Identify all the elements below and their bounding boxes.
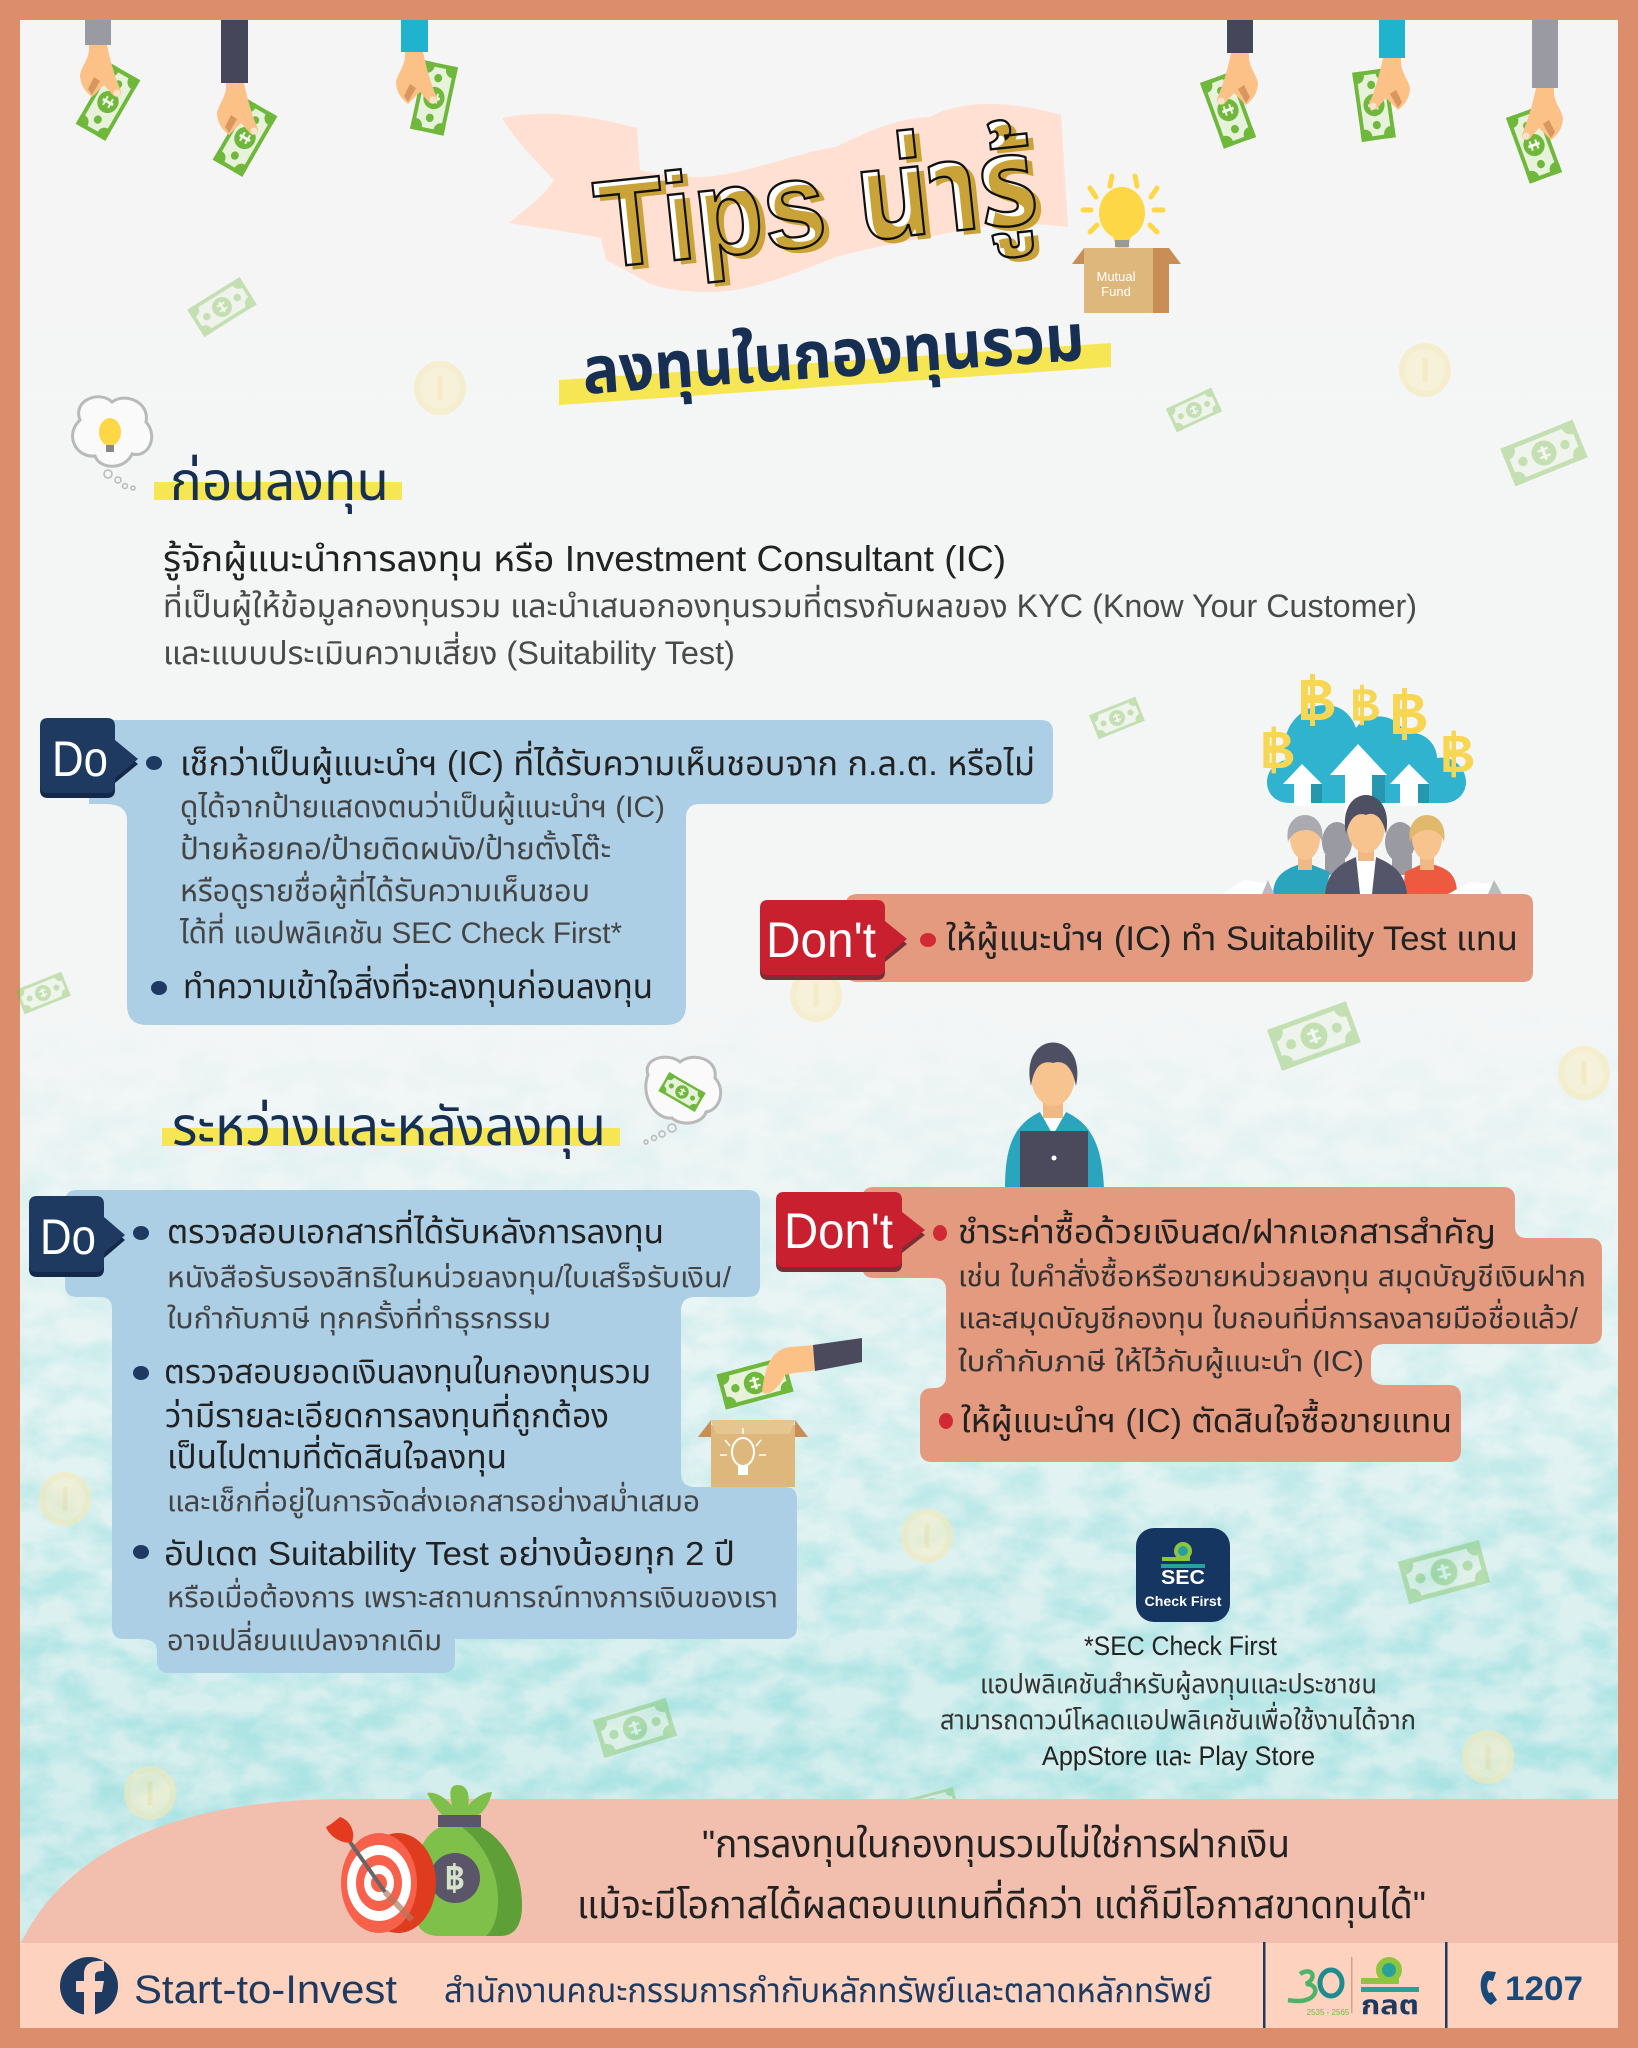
icon: bulb in mutual fund box: Mutual xyxy=(1096,269,1136,284)
title: Tips น่ารู้ xyxy=(588,111,1044,301)
icon: thought cloud with bulb xyxy=(73,397,152,490)
hand 5 with bill xyxy=(1348,20,1410,146)
intro text xyxy=(163,538,1417,671)
quote band xyxy=(20,1799,1618,1945)
do badge: Do xyxy=(52,731,108,787)
bullet item text: หรือดูรายชื่อผู้ที่ได้รับความเห็นชอบ xyxy=(180,870,590,909)
subtitle band xyxy=(559,343,1111,405)
icon: facebook xyxy=(60,1957,118,2015)
title: Tips น่ารู้ xyxy=(588,111,1044,301)
bullet item text: ว่ามีรายละเอียดการลงทุนที่ถูกต้อง xyxy=(165,1393,609,1436)
bullet item text: และเช็กที่อยู่ในการจัดส่งเอกสารอย่างสม่ำเสมอ xyxy=(167,1481,700,1519)
icon: box with bulb outline xyxy=(698,1420,808,1487)
bullet item text: เช็กว่าเป็นผู้แนะนำฯ (IC) ที่ได้รับความเห็นชอบจาก ก.ล.ต. หรือไม่ xyxy=(180,740,1035,784)
logos: 30 years and SEC: 2535 - 2565 xyxy=(1307,2008,1350,2017)
subtitle: ลงทุนในกองทุนรวม xyxy=(580,300,1087,411)
don't badge xyxy=(760,900,907,980)
bullet item text: ให้ผู้แนะนำฯ (IC) ทำ Suitability Test แทน xyxy=(946,920,1518,959)
icon: target with dart xyxy=(326,1817,436,1933)
bullet item text: ป้ายห้อยคอ/ป้ายติดผนัง/ป้ายตั้งโต๊ะ xyxy=(180,830,611,866)
quote text xyxy=(577,1824,1426,1928)
intro text: รู้จักผู้แนะนำการลงทุน หรือ Investment Consultant (IC) xyxy=(163,538,1006,580)
bullet item text: อาจเปลี่ยนแปลงจากเดิม xyxy=(167,1620,442,1657)
bullet item text: ใบกำกับภาษี ให้ไว้กับผู้แนะนำ (IC) xyxy=(958,1346,1364,1379)
icon: hand dropping money xyxy=(712,1338,862,1414)
footer band xyxy=(20,1943,1618,2028)
bullet item text: ดูได้จากป้ายแสดงตนว่าเป็นผู้แนะนำฯ (IC) xyxy=(180,791,665,825)
bullet item text: ใบกำกับภาษี ทุกครั้งที่ทำธุรกรรม xyxy=(167,1298,551,1335)
bullet item text: ได้ที่ แอปพลิเคชัน SEC Check First* xyxy=(179,912,622,950)
title ribbon xyxy=(502,104,1068,292)
do badge xyxy=(40,718,138,798)
icon: bulb in mutual fund box xyxy=(1072,176,1181,313)
bullet item text: และสมุดบัญชีกองทุน ใบถอนที่มีการลงลายมือชื่อแล้ว/ xyxy=(958,1298,1579,1335)
heading: before investing: ก่อนลงทุน xyxy=(170,452,389,514)
bullet item text: หรือเมื่อต้องการ เพราะสถานการณ์ทางการเงินของเรา xyxy=(167,1577,778,1614)
icon: cloud with investors xyxy=(1222,674,1502,894)
icon: thought cloud with money xyxy=(644,1057,721,1144)
icon: SEC Check First app xyxy=(1136,1528,1230,1622)
do badge xyxy=(29,1196,125,1277)
hand 3 with bill xyxy=(396,20,462,140)
quote text: "การลงทุนในกองทุนรวมไม่ใช่การฝากเงิน xyxy=(702,1824,1290,1867)
panel: do during and after investing xyxy=(29,1190,797,1673)
bullet item text: ตรวจสอบยอดเงินลงทุนในกองทุนรวม xyxy=(164,1353,651,1392)
hand 2 with bill xyxy=(208,20,282,182)
bullet item text: อัปเดต Suitability Test อย่างน้อยทุก 2 ปี xyxy=(164,1535,735,1574)
do badge: Do xyxy=(40,1209,96,1265)
icon: money bag: ฿ xyxy=(445,1858,465,1899)
bullet item text xyxy=(133,1209,732,1335)
SEC Check First note: AppStore และ Play Store xyxy=(1042,1741,1315,1771)
logos: 30 years and SEC xyxy=(1263,1942,1448,2028)
bullet item text: ตรวจสอบเอกสารที่ได้รับหลังการลงทุน xyxy=(167,1209,664,1252)
organisation name: สำนักงานคณะกรรมการกำกับหลักทรัพย์และตลาดหลักทรัพย์ xyxy=(444,1972,1212,2010)
hand 6 with bill xyxy=(1502,20,1566,188)
logos: 30 years and SEC: กลต xyxy=(1361,1990,1419,2020)
facebook page name: Start-to-Invest xyxy=(134,1968,397,2012)
bullet item text xyxy=(146,740,1035,950)
bullet item text xyxy=(133,1353,700,1519)
bullet item text: ให้ผู้แนะนำฯ (IC) ตัดสินใจซื้อขายแทน xyxy=(961,1398,1452,1441)
panel: do before investing xyxy=(40,718,1053,1025)
icon: SEC Check First app: SEC xyxy=(1161,1567,1205,1589)
SEC Check First note: สามารถดาวน์โหลดแอปพลิเคชันเพื่อใช้งานได้จาก xyxy=(940,1701,1416,1735)
panel: don't before investing xyxy=(760,894,1533,982)
icon: SEC Check First app: Check First xyxy=(1144,1593,1222,1609)
bullet item text xyxy=(933,1209,1586,1379)
faded bills and coins xyxy=(12,273,1593,1828)
intro text: ที่เป็นผู้ให้ข้อมูลกองทุนรวม และนำเสนอกองทุนรวมที่ตรงกับผลของ KYC (Know Your Customer) xyxy=(163,584,1417,626)
hand 4 with bill xyxy=(1196,20,1260,153)
quote text: แม้จะมีโอกาสได้ผลตอบแทนที่ดีกว่า แต่ก็มีโอกาสขาดทุนได้" xyxy=(577,1879,1426,1928)
SEC Check First note: *SEC Check First xyxy=(1084,1631,1277,1661)
don't badge: Don't xyxy=(784,1203,893,1259)
bullet item text: ทำความเข้าใจสิ่งที่จะลงทุนก่อนลงทุน xyxy=(183,963,653,1007)
watercolor wash xyxy=(20,1000,1618,1950)
don't badge xyxy=(776,1192,925,1272)
icon: money bag xyxy=(413,1785,522,1936)
SEC Check First note: แอปพลิเคชันสำหรับผู้ลงทุนและประชาชน xyxy=(980,1669,1377,1700)
bullet item text: เป็นไปตามที่ตัดสินใจลงทุน xyxy=(167,1434,507,1477)
bullet item text: เช่น ใบคำสั่งซื้อหรือขายหน่วยลงทุน สมุดบัญชีเงินฝาก xyxy=(958,1256,1586,1293)
bullet item text xyxy=(133,1535,778,1657)
SEC Check First note xyxy=(940,1631,1416,1771)
hotline number: 1207 xyxy=(1505,1970,1583,2008)
bullet item text: ชำระค่าซื้อด้วยเงินสด/ฝากเอกสารสำคัญ xyxy=(958,1209,1496,1250)
icon: person at laptop xyxy=(1005,1042,1104,1188)
icon: phone xyxy=(1481,1971,1497,2005)
hand 1 with bill xyxy=(71,20,145,146)
title: Tips น่ารู้ xyxy=(595,116,1051,305)
panel: don't during and after investing xyxy=(776,1187,1602,1462)
heading: during and after investing: ระหว่างและหลังลงทุน xyxy=(172,1097,606,1159)
bullet item text: หนังสือรับรองสิทธิในหน่วยลงทุน/ใบเสร็จรับเงิน/ xyxy=(167,1262,732,1294)
icon: bulb in mutual fund box: Fund xyxy=(1101,284,1131,299)
don't badge: Don't xyxy=(766,912,876,968)
intro text: และแบบประเมินความเสี่ยง (Suitability Test) xyxy=(163,631,735,671)
